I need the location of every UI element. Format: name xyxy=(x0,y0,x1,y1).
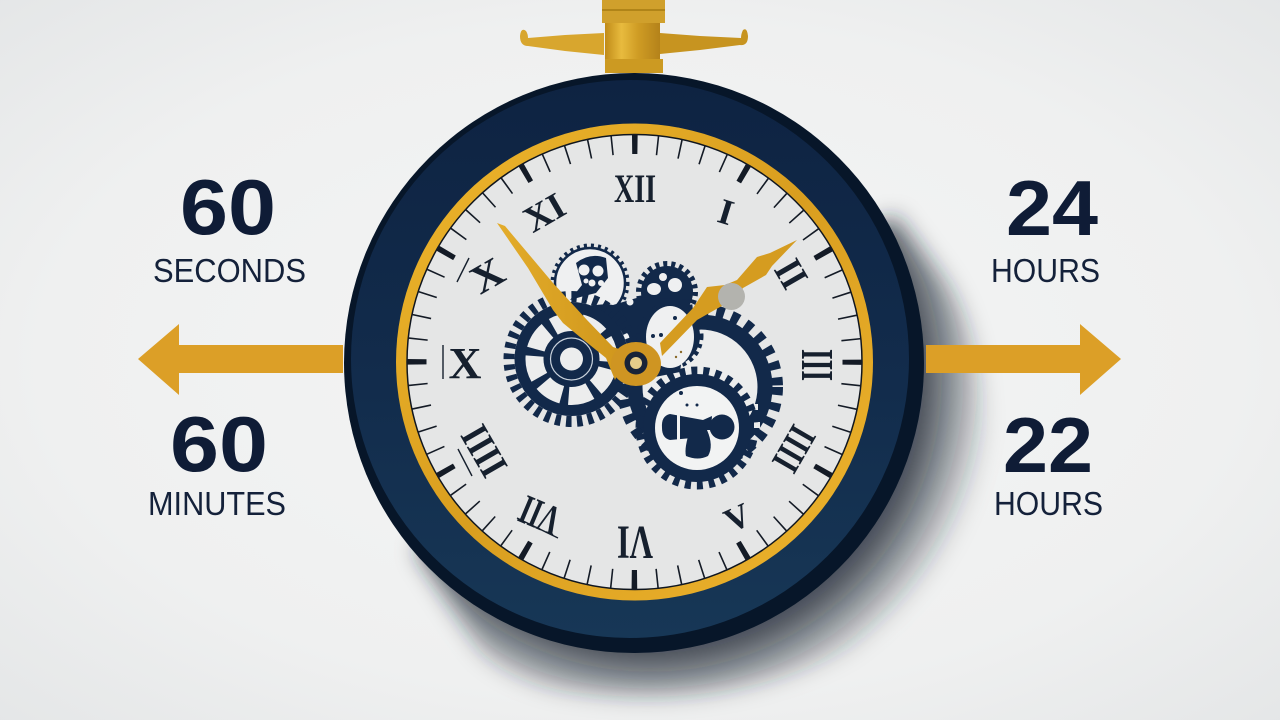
roman numerals: IIΛ xyxy=(512,487,567,545)
gear: top right xyxy=(639,264,695,320)
clock dial xyxy=(407,134,862,590)
roman numerals: X xyxy=(448,339,482,388)
gear: large rear right xyxy=(623,310,777,464)
roman numerals: IIII xyxy=(763,418,825,480)
roman numerals: I xyxy=(713,191,739,233)
roman numerals: II xyxy=(765,251,817,296)
roman numerals: III xyxy=(792,349,843,381)
stat: 22 hours: HOURS xyxy=(994,485,1103,522)
centre hub xyxy=(611,342,661,386)
stat: 24 hours: HOURS xyxy=(991,252,1100,289)
gear: centre connecting body xyxy=(577,297,690,383)
clock drop shadow xyxy=(415,215,985,697)
stat: 60 minutes xyxy=(148,400,286,522)
roman numerals: IIII xyxy=(452,417,517,485)
stat: 24 hours: 24 xyxy=(1006,164,1098,252)
hour ticks xyxy=(416,144,852,580)
hand joint: grey disc xyxy=(718,283,745,310)
crown and stem xyxy=(520,0,748,73)
stat: 60 seconds: SECONDS xyxy=(153,252,306,289)
clock case xyxy=(344,73,924,653)
arrow: left xyxy=(138,324,343,395)
gear: lower right xyxy=(640,371,754,485)
stat: 22 hours xyxy=(994,401,1103,522)
stat: 60 minutes: 60 xyxy=(170,400,268,488)
gold bezel ring xyxy=(396,124,873,600)
gear: top left xyxy=(553,246,627,320)
gear: middle xyxy=(639,305,701,368)
roman numerals: X xyxy=(462,248,512,303)
stat: 60 minutes: MINUTES xyxy=(148,485,286,522)
stat: 60 seconds xyxy=(153,163,306,289)
gear: large left xyxy=(509,296,634,422)
stat: 60 seconds: 60 xyxy=(180,163,276,251)
roman numerals xyxy=(443,166,843,569)
arrow: right xyxy=(926,324,1121,395)
stat: 22 hours: 22 xyxy=(1003,401,1093,489)
minute hand xyxy=(497,223,628,380)
stat: 24 hours xyxy=(991,164,1100,289)
roman numerals: XI xyxy=(517,185,573,241)
hour hand xyxy=(660,240,797,356)
minute ticks xyxy=(416,144,852,580)
roman numerals: IΛ xyxy=(617,516,653,569)
roman numerals: XII xyxy=(614,166,656,211)
roman numerals: V xyxy=(719,496,757,540)
